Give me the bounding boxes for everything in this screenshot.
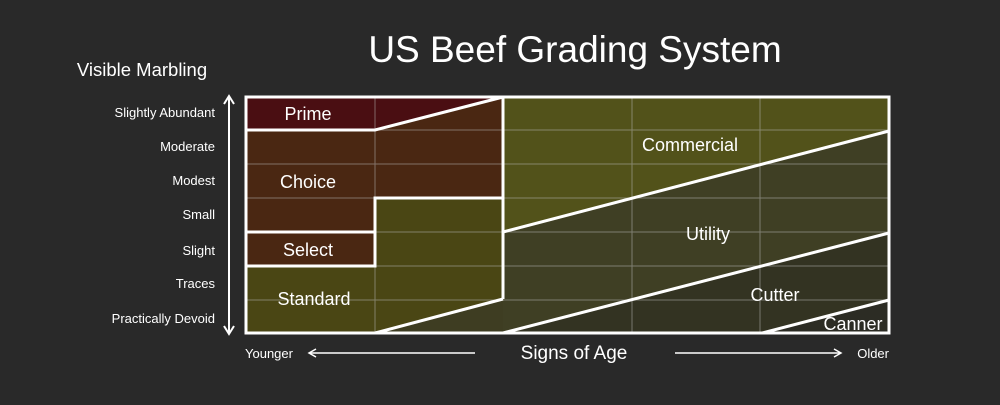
grade labels: Select bbox=[283, 240, 333, 260]
region: standard bbox=[246, 198, 503, 333]
grade labels: Commercial bbox=[642, 135, 738, 155]
y-axis labels: Traces bbox=[176, 276, 215, 291]
grade labels bbox=[277, 104, 883, 334]
y-axis title: Visible Marbling bbox=[77, 59, 207, 80]
chart bbox=[246, 97, 889, 334]
x-axis: Signs of Age bbox=[521, 343, 627, 364]
grade labels: Standard bbox=[277, 289, 351, 309]
region: utility bbox=[503, 131, 889, 333]
y-axis labels: Modest bbox=[172, 173, 215, 188]
y-axis labels: Slight bbox=[182, 243, 215, 258]
region: prime bbox=[246, 97, 503, 130]
title: US Beef Grading System bbox=[368, 29, 782, 70]
y-axis labels bbox=[112, 105, 215, 326]
grade labels: Prime bbox=[284, 104, 332, 124]
region: cutter bbox=[503, 233, 889, 333]
grade labels: Utility bbox=[686, 224, 730, 244]
y-axis labels: Practically Devoid bbox=[112, 311, 215, 326]
region: choice bbox=[246, 97, 503, 266]
x-axis: Younger bbox=[245, 346, 294, 361]
y-axis labels: Small bbox=[182, 207, 215, 222]
grade labels: Cutter bbox=[750, 285, 800, 305]
region: commercial bbox=[503, 97, 889, 232]
region: canner bbox=[762, 300, 889, 333]
y-axis arrow bbox=[224, 96, 234, 334]
grade labels: Choice bbox=[280, 172, 336, 192]
y-axis labels: Moderate bbox=[160, 139, 215, 154]
y-axis labels: Slightly Abundant bbox=[115, 105, 215, 120]
grade labels: Canner bbox=[823, 314, 883, 334]
x-axis bbox=[245, 343, 890, 364]
x-axis: Older bbox=[857, 346, 890, 361]
